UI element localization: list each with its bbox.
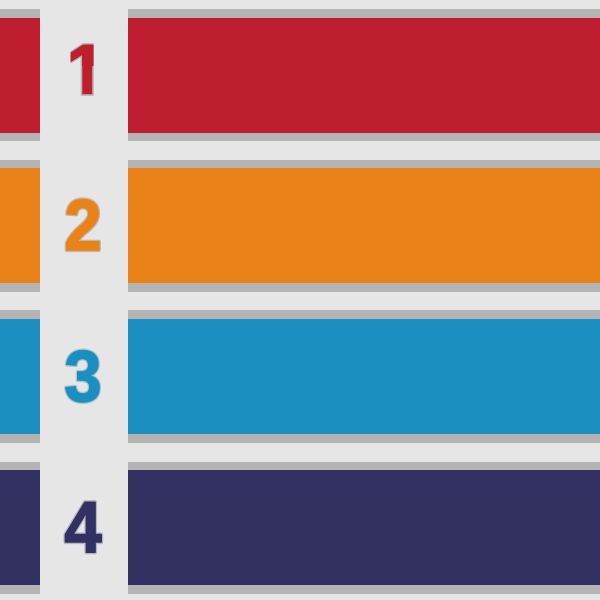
band 2: orange (0, 160, 600, 292)
number 4: 4 (64, 487, 102, 568)
band 4: navy (0, 462, 600, 594)
number 2: 2 (64, 185, 102, 266)
band 3: blue (0, 310, 600, 443)
band 1: red (0, 9, 600, 141)
number 3: 3 (64, 336, 102, 417)
number 4: 4 (64, 487, 102, 568)
number 1 (70, 43, 94, 96)
number 2: 2 (64, 185, 102, 266)
number 3: 3 (64, 336, 102, 417)
number 1: 1 (66, 31, 106, 111)
number 1: 1 (66, 31, 106, 111)
